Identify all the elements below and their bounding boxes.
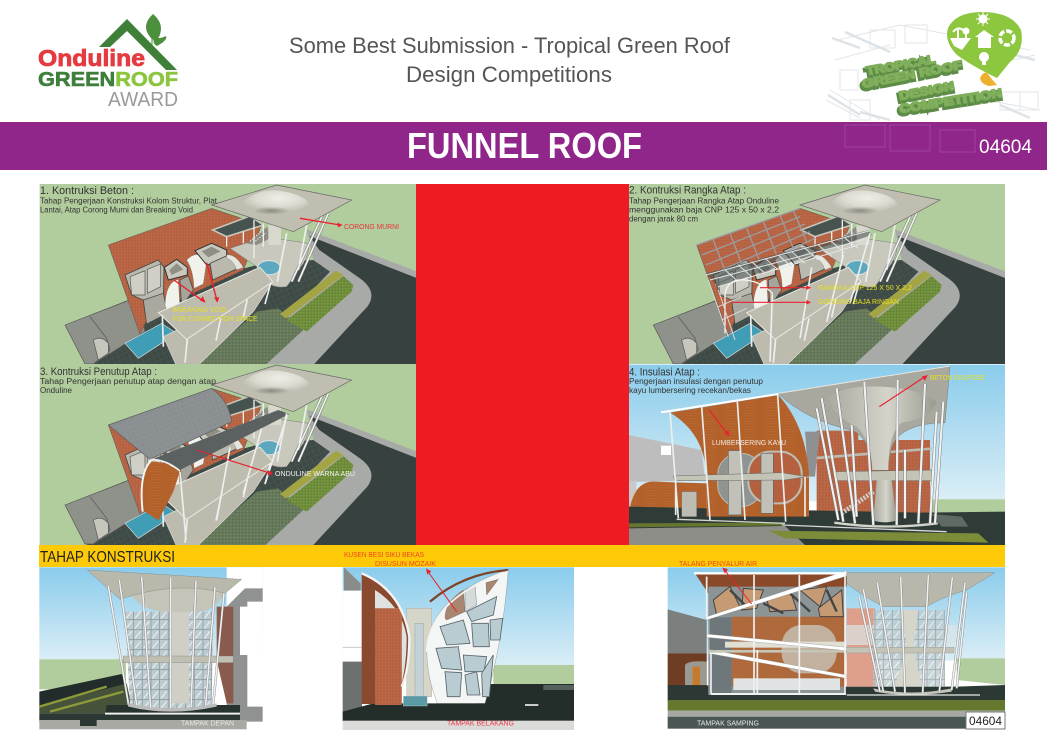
panel: step 3 roof covering xyxy=(37,360,420,550)
view label: TAMPAK BELAKANG xyxy=(447,720,514,728)
elevation: front view xyxy=(39,567,263,729)
step 4 heading and description: Pengerjaan insulasi dengan penutup xyxy=(629,377,764,386)
step 4 heading and description xyxy=(629,366,764,395)
step 3 heading and description: 3. Kontruksi Penutup Atap : xyxy=(40,366,157,378)
3D green lettering: COMPETITION xyxy=(898,86,1003,116)
step 2 heading and description: dengan jarak 80 cm xyxy=(629,214,698,224)
3D green lettering: TROPICAL xyxy=(865,52,936,78)
3D green lettering: GREEN ROOF xyxy=(861,58,964,91)
step 1 heading and description: Tahap Pengerjaan Konstruksi Kolom Struktur, Plat xyxy=(40,196,218,206)
callout: gording baja ringan: GORDING BAJA RINGAN xyxy=(818,299,899,306)
step 1 heading and description: 1. Kontruksi Beton : xyxy=(40,185,134,197)
panel: step 2 roof frame construction xyxy=(625,180,1008,370)
callout: kusen besi siku bekas: KUSEN BESI SIKU BEKAS xyxy=(344,552,424,559)
step 4 heading and description: 4. Insulasi Atap : xyxy=(629,366,700,378)
panel: step 4 roof insulation xyxy=(629,365,1005,545)
submission number: 04604 xyxy=(979,137,1032,158)
step 1 heading and description: Lantai, Atap Corong Murni dan Breaking Void xyxy=(40,206,193,214)
callout: breaking void: BREAKING VOID xyxy=(172,307,226,314)
heading: competition title xyxy=(289,33,731,87)
heading: competition title: Some Best Submission - Tropical Green Roof xyxy=(289,33,731,58)
logo: Onduline Green Roof Award xyxy=(38,14,178,111)
step 2 heading and description: 2. Kontruksi Rangka Atap : xyxy=(629,184,746,196)
callout: kusen besi siku bekas: DISUSUN MOZAIK xyxy=(375,561,436,568)
3D green lettering: COMPETITION xyxy=(897,88,1002,118)
main title: FUNNEL ROOF xyxy=(407,125,642,166)
GREENROOF wordmark: GREEN ROOF xyxy=(38,69,178,91)
callout: onduline warna abu: ONDULINE WARNA ABU xyxy=(275,471,355,478)
AWARD wordmark: AWARD xyxy=(108,89,178,111)
3D green lettering xyxy=(860,52,1003,118)
step 2 heading and description: menggunakan baja CNP 125 x 50 x 2,2 xyxy=(629,206,780,214)
heading: competition title: Design Competitions xyxy=(406,62,612,87)
3D green lettering: DESIGN xyxy=(898,79,956,103)
step 3 heading and description xyxy=(40,366,217,395)
callout: beton ekspose: BETON EKSPOSE xyxy=(930,375,985,382)
3D green lettering: DESIGN xyxy=(897,81,955,105)
step 4 heading and description: kayu lumbersering recekan/bekas xyxy=(629,386,751,395)
callout: lumbersering kayu: LUMBERSERING KAYU xyxy=(712,440,786,447)
callout: breaking void xyxy=(172,307,258,323)
panel: step 1 concrete construction xyxy=(37,180,420,370)
purple title band xyxy=(0,122,1047,170)
step 2 heading and description xyxy=(629,184,780,224)
logo: Tropical Green Roof Design Competition xyxy=(826,12,1040,152)
view label: TAMPAK SAMPING xyxy=(697,720,759,728)
submission number box: 04604 xyxy=(969,714,1002,728)
callout: corong murni: CORONG MURNI xyxy=(344,224,399,231)
icon: leaves xyxy=(146,14,166,46)
step 1 heading and description xyxy=(40,185,218,214)
elevation: rear view xyxy=(343,552,574,730)
step 3 heading and description: Tahap Pengerjaan penutup atap dengan atap xyxy=(40,377,217,386)
icon: house roof xyxy=(99,19,177,70)
Onduline wordmark: Onduline xyxy=(38,45,145,71)
3D green lettering: GREEN ROOF xyxy=(860,60,963,93)
elevation: side view xyxy=(668,561,1005,729)
step 2 heading and description: Tahap Pengerjaan Rangka Atap Onduline xyxy=(629,196,780,206)
callout: rangka CNP: RANGKA CNP 125 X 50 X 2,2 xyxy=(818,285,912,292)
callout: talang penyalur air: TALANG PENYALUR AIR xyxy=(679,561,757,568)
callout: kusen besi siku bekas xyxy=(344,552,436,568)
icon: yellow bird xyxy=(980,73,997,86)
step 3 heading and description: Onduline xyxy=(40,386,73,395)
callout: breaking void: FOR CONNECTION SPACE xyxy=(172,316,258,323)
section band: tahap konstruksi xyxy=(39,545,1005,567)
red blank panel xyxy=(416,184,629,545)
wireframe lettering background xyxy=(826,25,1040,120)
3D green lettering: TROPICAL xyxy=(864,55,935,80)
view label: TAMPAK DEPAN xyxy=(181,720,234,728)
speech bubble with eco icons xyxy=(947,12,1022,78)
section heading: TAHAP KONSTRUKSI xyxy=(40,549,175,566)
